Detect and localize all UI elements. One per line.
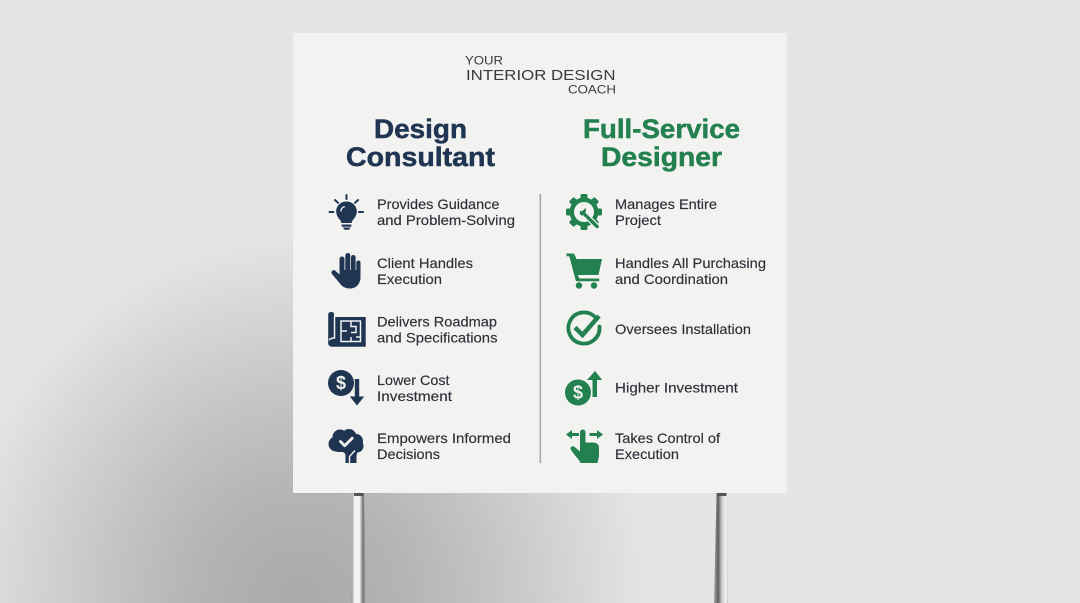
heading: Full-Service Designer xyxy=(583,114,740,172)
icon: shopping cart xyxy=(566,254,602,289)
logo: Your Interior Design Coach xyxy=(465,53,616,96)
icon: swipe hand xyxy=(566,430,603,463)
icon: light bulb xyxy=(330,195,363,230)
icon: dollar with up arrow xyxy=(565,371,602,406)
text: manages entire: Project xyxy=(615,212,661,228)
text: client handles xyxy=(377,255,473,287)
text: manages entire: Manages Entire xyxy=(615,196,717,212)
logo: Your Interior Design Coach: YOUR xyxy=(465,53,503,67)
text: takes control: Execution xyxy=(615,446,679,462)
text: provides guidance: and Problem-Solving xyxy=(377,212,515,228)
text: manages entire xyxy=(615,196,717,228)
text: lower cost: Investment xyxy=(377,388,452,404)
panel: sign board xyxy=(293,33,787,493)
text: lower cost xyxy=(377,372,452,404)
text: higher investment: Higher Investment xyxy=(615,380,738,396)
text: empowers informed: Empowers Informed xyxy=(377,430,511,446)
text: empowers informed xyxy=(377,430,511,462)
icon: dollar with down arrow xyxy=(328,370,364,406)
icon: gear with wrench xyxy=(566,194,602,230)
text: takes control xyxy=(615,430,720,462)
text: handles all purchasing: and Coordination xyxy=(615,271,728,287)
heading: Full-Service Designer: Full-Service xyxy=(583,114,740,144)
text: provides guidance xyxy=(377,196,515,228)
icon: blueprint xyxy=(328,312,366,347)
text: oversees installation: Oversees Installation xyxy=(615,321,751,337)
text: handles all purchasing: Handles All Purchasing xyxy=(615,255,766,271)
icon: dollar with up arrow: $ xyxy=(573,382,583,402)
text: provides guidance: Provides Guidance xyxy=(377,196,500,212)
text: delivers roadmap xyxy=(377,314,498,346)
heading: Design Consultant: Design xyxy=(374,114,467,144)
logo: Your Interior Design Coach: INTERIOR DESIGN xyxy=(466,67,616,84)
heading: Design Consultant: Consultant xyxy=(346,142,495,172)
icon: dollar with down arrow: $ xyxy=(336,373,346,393)
heading: Full-Service Designer: Designer xyxy=(601,142,723,172)
right sign post xyxy=(714,493,728,603)
text: client handles: Execution xyxy=(377,271,442,287)
text: lower cost: Lower Cost xyxy=(377,372,450,388)
text: empowers informed: Decisions xyxy=(377,446,440,462)
text: takes control: Takes Control of xyxy=(615,430,720,446)
icon: hand xyxy=(331,253,360,288)
left sign post xyxy=(352,493,366,603)
text: delivers roadmap: and Specifications xyxy=(377,330,498,346)
heading: Design Consultant xyxy=(346,114,495,172)
center divider xyxy=(540,194,541,463)
icon: brain with check xyxy=(328,429,364,463)
icon: check circle xyxy=(568,312,600,344)
text: handles all purchasing xyxy=(615,255,766,287)
text: client handles: Client Handles xyxy=(377,255,473,271)
text: delivers roadmap: Delivers Roadmap xyxy=(377,314,497,330)
logo: Your Interior Design Coach: COACH xyxy=(568,82,616,96)
